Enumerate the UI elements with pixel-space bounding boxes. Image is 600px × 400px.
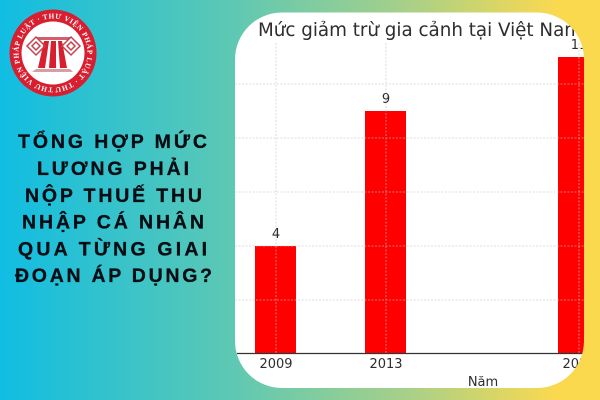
x axis (237, 352, 584, 354)
heading: QUA TỪNG GIAI (18, 236, 207, 260)
chart title: Mức giảm trừ gia cảnh tại Việt Nam (258, 20, 582, 41)
heading: ĐOẠN ÁP DỤNG? (15, 264, 212, 287)
x tick labels: 2009 (259, 357, 293, 372)
panel: chart card (235, 12, 599, 390)
x tick labels: 2020 (562, 357, 596, 372)
heading: TỔNG HỢP MỨC (18, 129, 207, 153)
bar: 2009 (255, 246, 296, 353)
x axis title: Năm (468, 375, 498, 390)
x tick labels (260, 358, 581, 368)
heading (15, 129, 212, 287)
value labels: 4 (272, 227, 280, 242)
icon: temple columns (27, 37, 80, 72)
bar: 2020 (558, 57, 584, 353)
value labels: 9 (382, 92, 390, 107)
value labels (272, 38, 587, 242)
x tick labels: 2013 (369, 357, 403, 372)
bar: 2013 (365, 111, 406, 353)
heading: NỘP THUẾ THU (25, 183, 202, 207)
heading: LƯƠNG PHẢI (37, 157, 189, 180)
heading: NHẬP CÁ NHÂN (22, 210, 204, 234)
value labels: 11 (571, 38, 587, 53)
